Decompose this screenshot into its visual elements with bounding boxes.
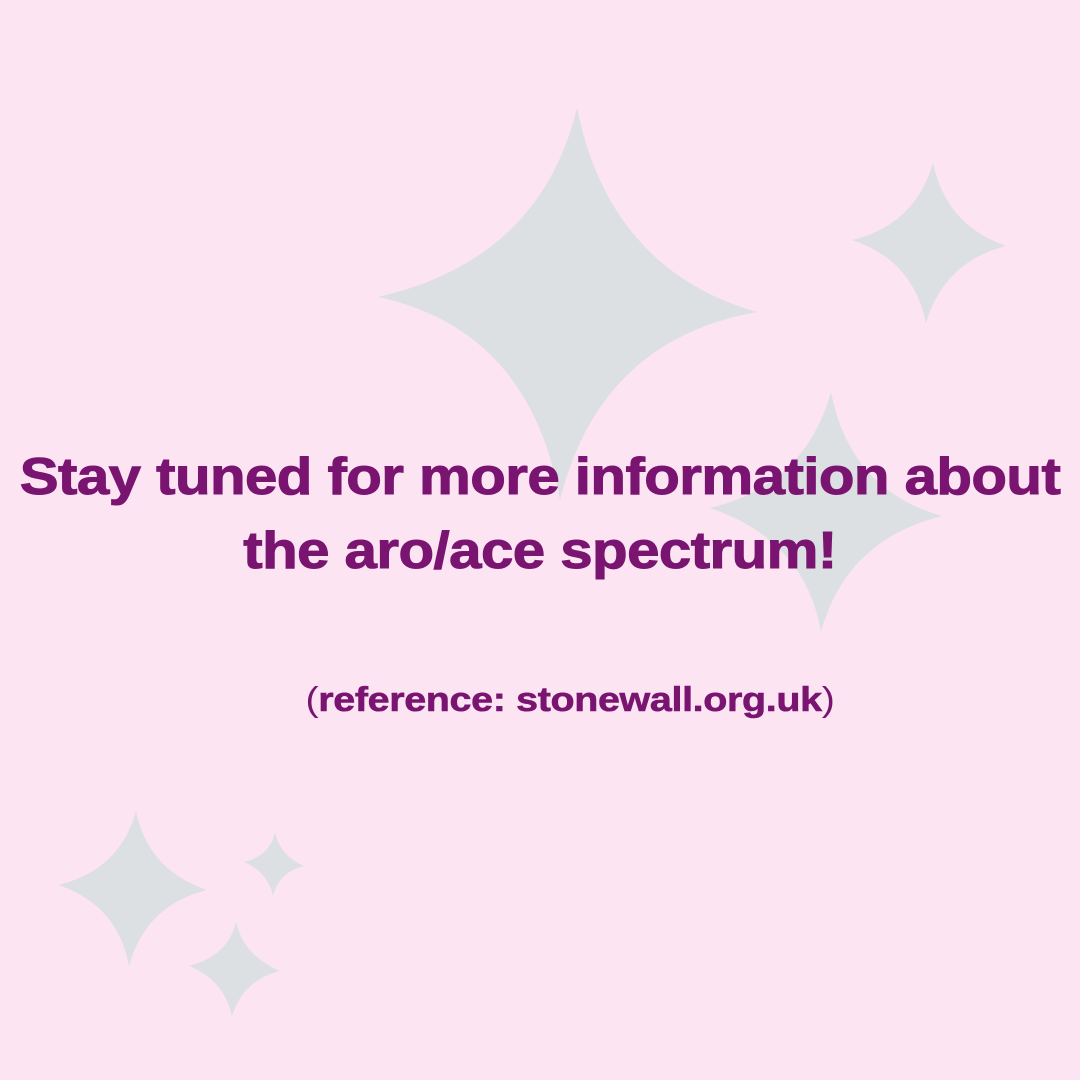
icon: top-right sparkle <box>852 163 1006 323</box>
icon: large sparkle <box>378 108 757 500</box>
headline: the aro/ace spectrum! <box>243 522 837 580</box>
icon: small sparkle <box>244 832 304 896</box>
headline <box>20 448 1061 580</box>
icon: small bottom sparkle <box>189 922 280 1016</box>
icon: bottom-left sparkle <box>58 811 207 966</box>
headline: Stay tuned for more information about <box>20 448 1060 506</box>
reference note: (reference: stonewall.org.uk) <box>305 681 835 719</box>
icon: middle-right sparkle <box>710 392 942 632</box>
